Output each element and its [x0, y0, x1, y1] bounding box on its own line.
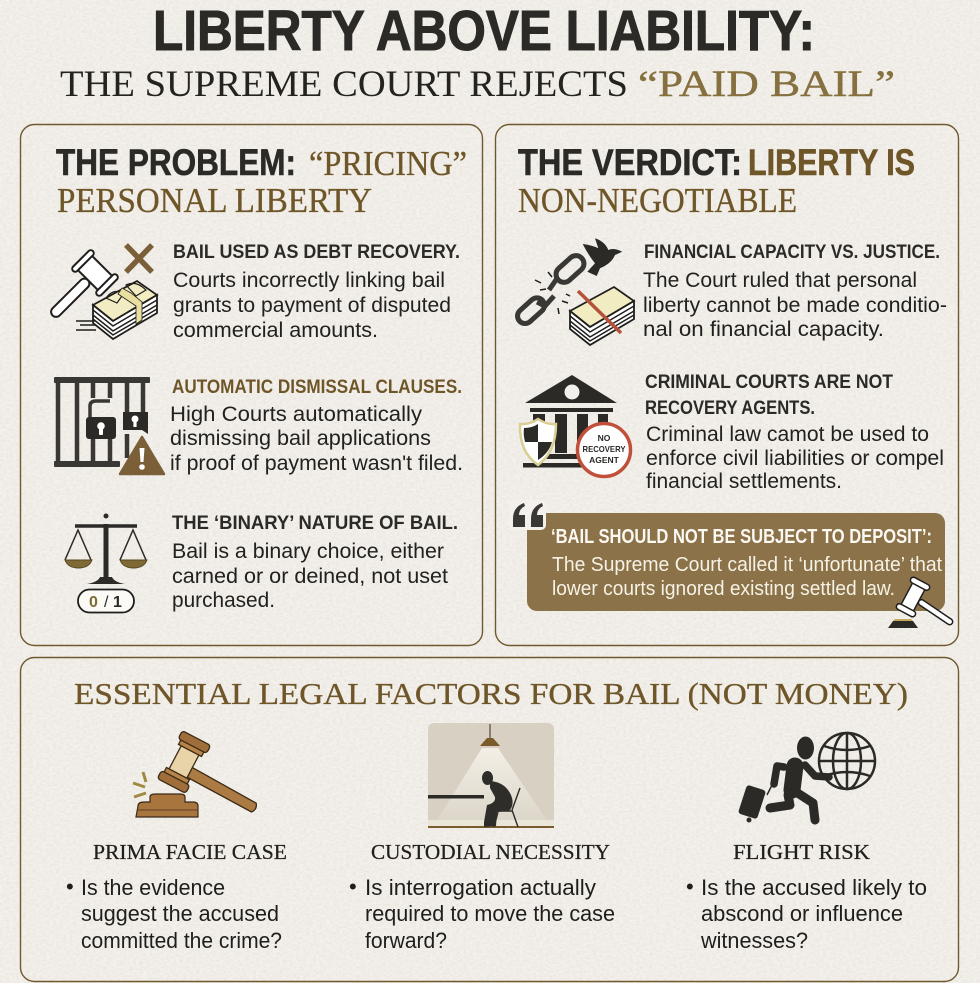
text: automatic dismissal clauses: dismissing bail applications: [170, 427, 431, 450]
heading: the problem: [56, 142, 467, 220]
icon: wooden gavel: [133, 731, 272, 825]
text: financial capacity vs justice: nal on financial capacity.: [643, 318, 884, 341]
callout: bail should not be subject to deposit: lower courts ignored existing settled law.: [552, 578, 895, 600]
callout: bail should not be subject to deposit: [509, 500, 954, 628]
text: custodial necessity: •: [349, 874, 357, 899]
text: flight risk: Is the accused likely to: [701, 875, 927, 900]
text: prima facie case: committed the crime?: [81, 928, 282, 953]
text: the binary nature of bail: carned or or deined, not uset: [172, 565, 448, 588]
icon: fleeing figure with suitcase and globe: [738, 733, 875, 822]
text: bail used as debt recovery: grants to payment of disputed: [173, 294, 451, 317]
text: automatic dismissal clauses: High Courts automatically: [170, 403, 423, 426]
text: prima facie case: [66, 840, 287, 953]
text: financial capacity vs justice: liberty cannot be made conditio-: [643, 294, 947, 317]
image: custody cell with seated figure: [428, 723, 554, 828]
text: custodial necessity: required to move the case: [365, 901, 615, 926]
heading: the verdict: [518, 142, 915, 220]
text: bail used as debt recovery: Courts incorrectly linking bail: [173, 269, 445, 292]
icon: courthouse, shield and no recovery agent stamp: [520, 375, 630, 476]
icon: scales with 0/1 pill: [65, 514, 147, 612]
text: custodial necessity: forward?: [365, 928, 447, 953]
text: custodial necessity: Is interrogation actually: [365, 875, 596, 900]
subtitle: “PAID BAIL”: [638, 64, 895, 105]
icon: jail bars, locks and warning: [54, 377, 164, 474]
heading: the problem: “PRICING”: [309, 144, 467, 183]
subtitle: THE SUPREME COURT REJECTS: [60, 64, 628, 105]
text: flight risk: abscond or influence: [701, 901, 903, 926]
text: custodial necessity: CUSTODIAL NECESSITY: [371, 840, 610, 864]
text: financial capacity vs justice: The Court ruled that personal: [643, 269, 917, 292]
text: bail used as debt recovery: [173, 241, 460, 342]
panel: essential legal factors: [20, 658, 958, 982]
panel: the verdict: [496, 124, 958, 646]
title: LIBERTY ABOVE LIABILITY:: [153, 0, 815, 63]
text: criminal courts are not recovery agents: financial settlements.: [646, 470, 842, 493]
heading: the problem: THE PROBLEM:: [56, 142, 296, 183]
text: flight risk: •: [686, 874, 694, 899]
callout: bail should not be subject to deposit: The Supreme Court called it ‘unfortunate’ that: [552, 554, 942, 576]
text: criminal courts are not recovery agents: [645, 371, 944, 493]
icon: quotation mark: [509, 500, 546, 530]
text: bail used as debt recovery: BAIL USED AS DEBT RECOVERY.: [173, 241, 460, 263]
icon: courthouse, shield and no recovery agent stamp: NO: [598, 433, 611, 443]
text: criminal courts are not recovery agents: CRIMINAL COURTS ARE NOT: [645, 371, 893, 393]
heading: the verdict: NON-NEGOTIABLE: [518, 181, 797, 220]
text: flight risk: FLIGHT RISK: [733, 840, 870, 864]
icon: scales with 0/1 pill: 1: [113, 594, 122, 611]
icon: small white gavel: [888, 576, 954, 628]
text: flight risk: witnesses?: [700, 928, 808, 953]
text: custodial necessity: [349, 840, 615, 953]
text: financial capacity vs justice: FINANCIAL CAPACITY VS. JUSTICE.: [644, 241, 940, 263]
text: criminal courts are not recovery agents: enforce civil liabilities or compel: [646, 447, 944, 470]
text: prima facie case: PRIMA FACIE CASE: [93, 840, 287, 864]
text: prima facie case: Is the evidence: [81, 875, 225, 900]
text: automatic dismissal clauses: if proof of payment wasn't filed.: [170, 452, 463, 475]
text: criminal courts are not recovery agents: Criminal law camot be used to: [646, 423, 929, 446]
panel: the problem: [20, 124, 482, 646]
text: financial capacity vs justice: [643, 241, 947, 341]
text: bail used as debt recovery: commercial amounts.: [173, 319, 378, 342]
icon: courthouse, shield and no recovery agent stamp: RECOVERY: [582, 444, 626, 454]
text: the binary nature of bail: purchased.: [172, 589, 275, 612]
text: the binary nature of bail: THE ‘BINARY’ NATURE OF BAIL.: [172, 512, 458, 534]
text: the binary nature of bail: Bail is a binary choice, either: [172, 540, 444, 563]
text: prima facie case: •: [66, 874, 74, 899]
text: prima facie case: suggest the accused: [81, 901, 279, 926]
icon: scales with 0/1 pill: 0: [89, 594, 98, 611]
icon: courthouse, shield and no recovery agent stamp: AGENT: [589, 455, 620, 465]
icon: gavel, cross and money: [38, 245, 157, 339]
subtitle: [60, 64, 895, 105]
text: the binary nature of bail: [172, 512, 458, 612]
text: flight risk: [686, 840, 927, 953]
text: criminal courts are not recovery agents: RECOVERY AGENTS.: [645, 397, 815, 419]
heading: the problem: PERSONAL LIBERTY: [57, 181, 372, 220]
heading: the verdict: LIBERTY IS: [748, 142, 915, 183]
text: automatic dismissal clauses: [170, 376, 463, 475]
icon: scales with 0/1 pill: /: [104, 594, 109, 611]
heading: essential legal factors: ESSENTIAL LEGAL FACTORS FOR BAIL (NOT MONEY): [74, 676, 908, 711]
text: automatic dismissal clauses: AUTOMATIC DISMISSAL CLAUSES.: [172, 376, 462, 398]
icon: broken chain, dove and crossed money: [514, 238, 634, 345]
heading: the verdict: THE VERDICT:: [518, 142, 742, 183]
